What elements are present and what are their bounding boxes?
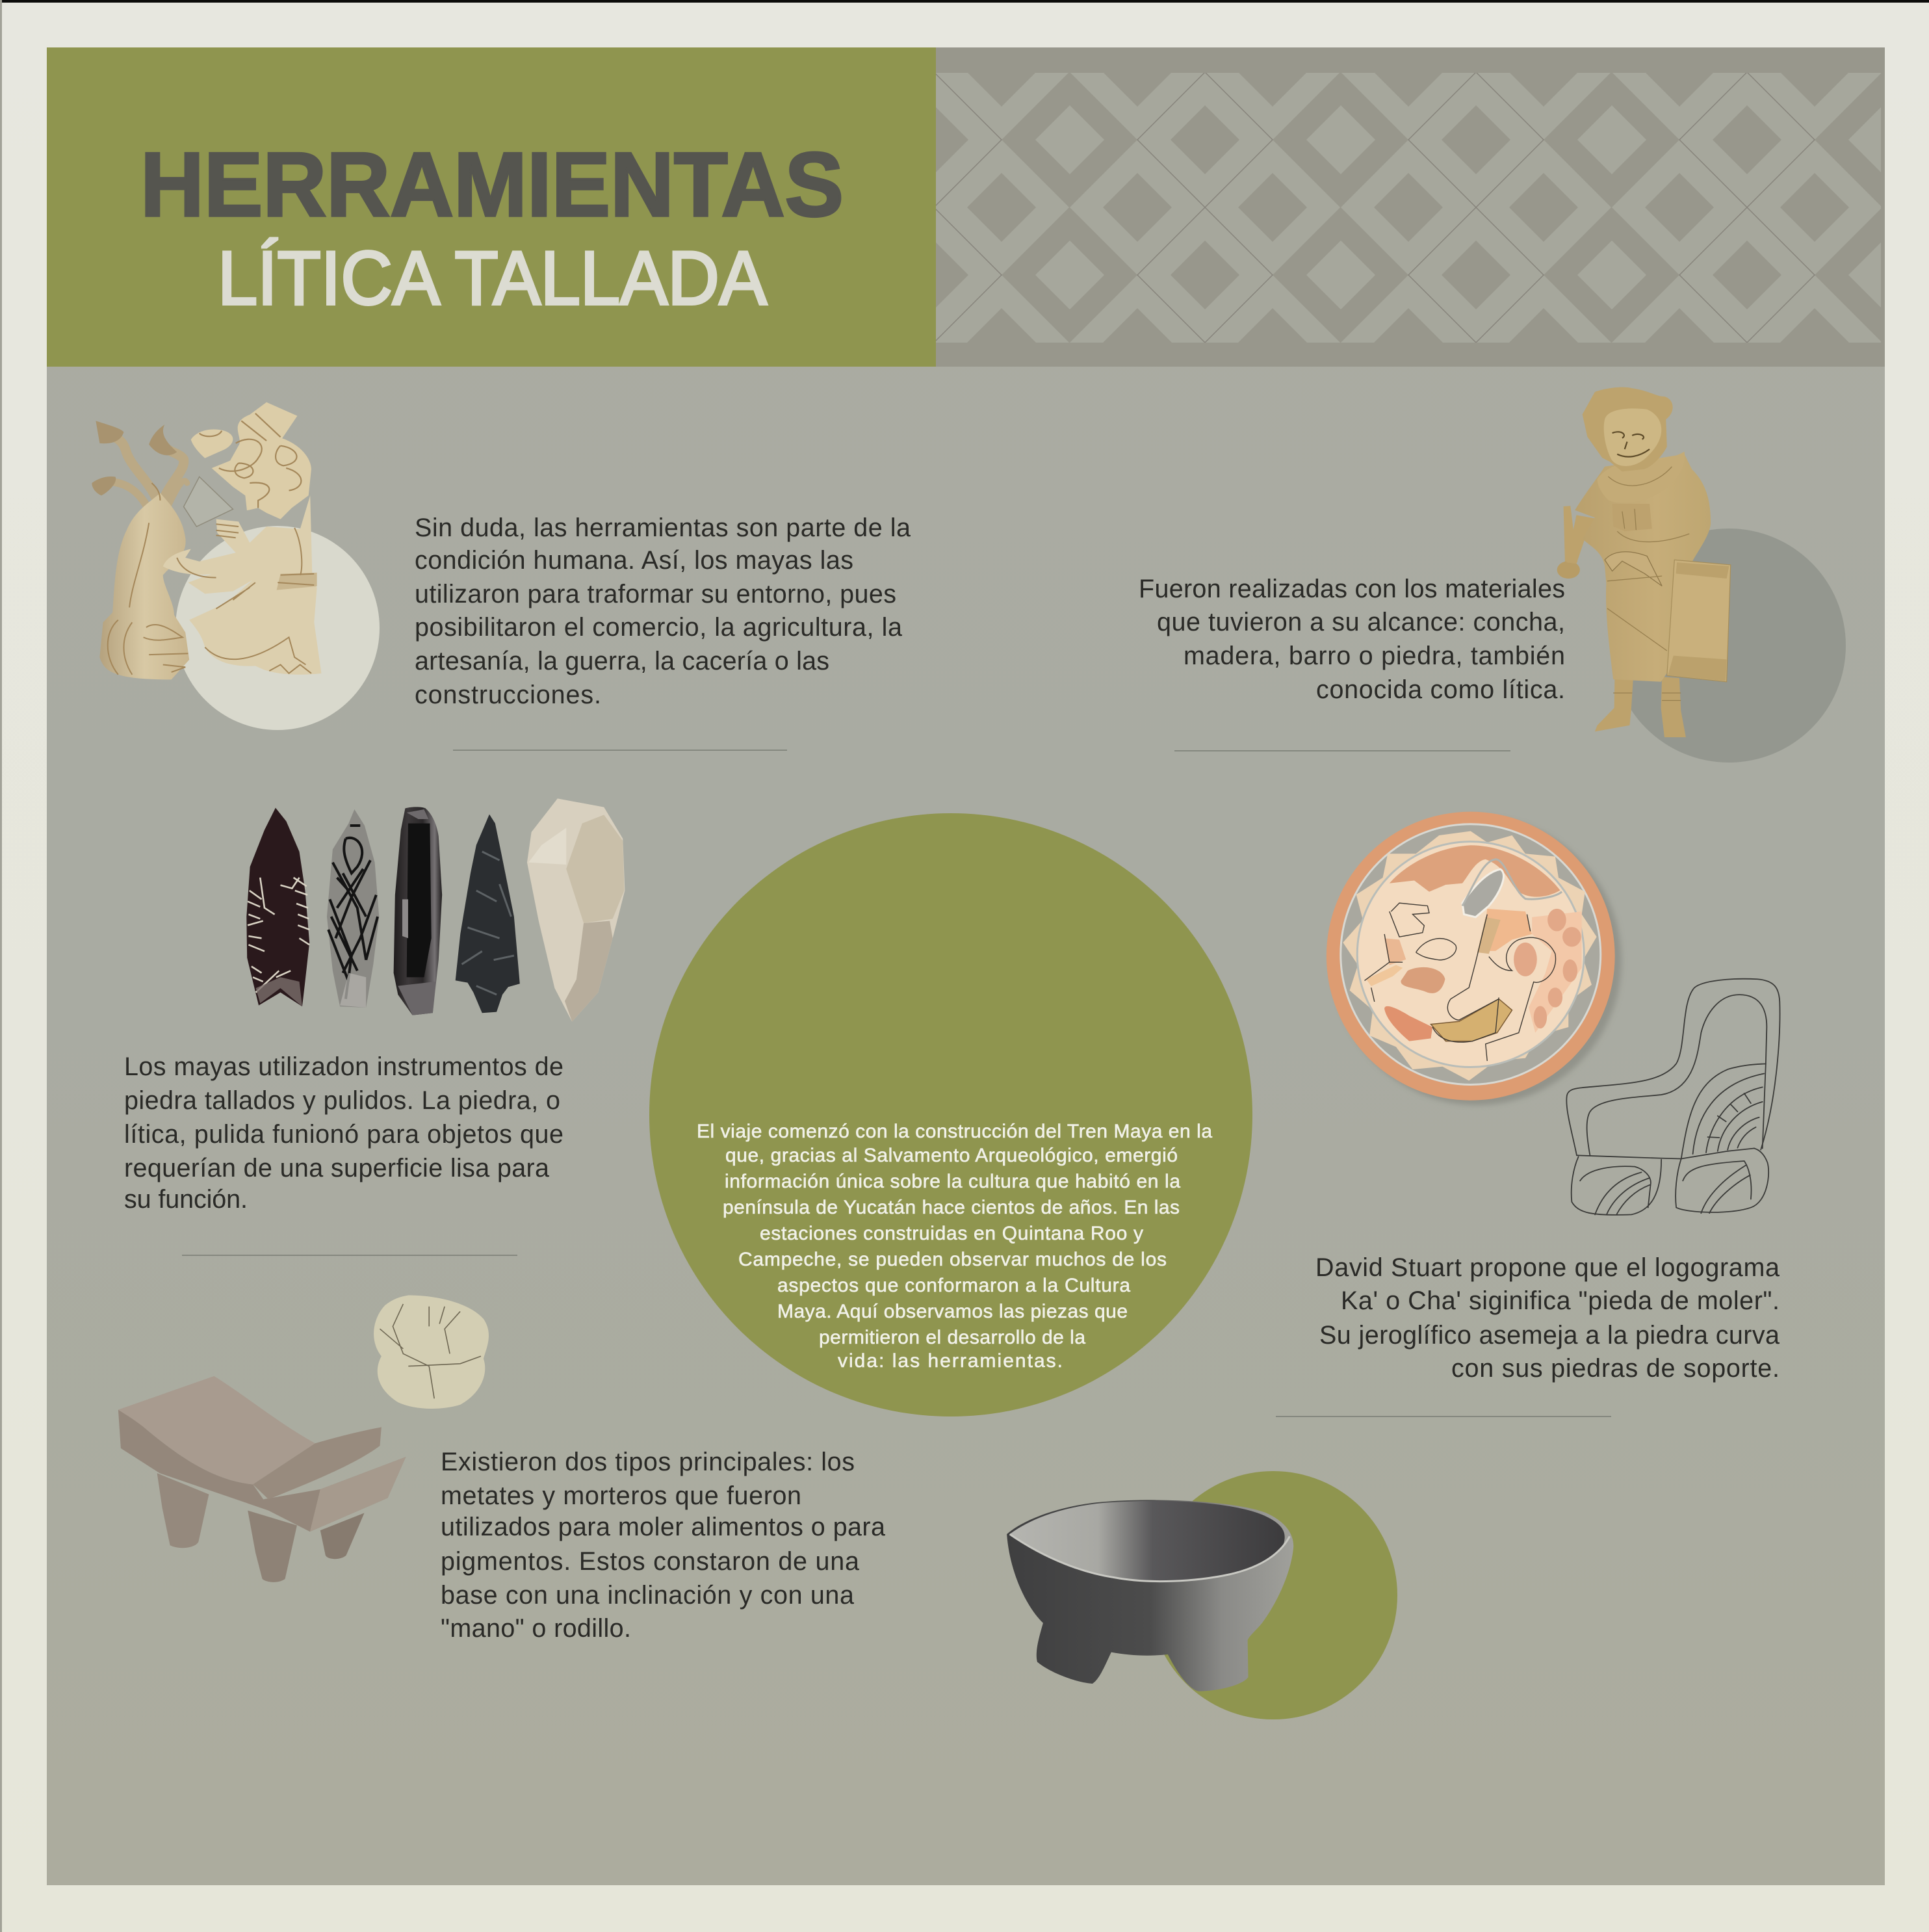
illustration: mortar with green circle [1007,1471,1397,1719]
text: condición humana [415,514,911,709]
plate top orange field [1390,845,1560,897]
text: tipos principales: Existieron dos tipos principales: los [441,1448,855,1476]
mano stone [374,1296,489,1409]
intro text: información única sobre la cultura que habitó en la [725,1171,1180,1192]
text: materiales: madera, barro o piedra, también [1184,642,1565,670]
scribe body [163,495,321,675]
text: condición humana: posibilitaron el comercio, la agricultura, la [415,613,902,642]
text: condición humana: Sin duda, las herramientas son parte de la [415,514,911,542]
text: David Stuart [1315,1253,1780,1383]
mortar body [1007,1500,1293,1691]
intro text: península de Yucatán hace cientos de años. En las [723,1197,1180,1218]
text: condición humana: construcciones. [415,681,601,709]
pale flake [527,798,625,1022]
text: tipos principales [441,1448,885,1643]
stone block being carved [184,477,233,527]
text: piedra tallada: Los mayas utilizadon instrumentos de [124,1052,563,1081]
text: tipos principales: utilizados para moler alimentos o para [441,1513,885,1541]
text: piedra tallada [124,1052,563,1214]
central green circle with intro text [649,813,1252,1416]
metate base [118,1410,406,1532]
legs [1595,678,1633,731]
illustration: stone tools [246,798,625,1022]
intro text: estaciones construidas en Quintana Roo y [760,1223,1143,1244]
text: condición humana: artesanía, la guerra, la cacería o las [415,647,829,675]
metate grinding surface [118,1376,315,1484]
point 1 [246,808,309,1006]
bag [1667,560,1731,682]
intro text [697,1121,1212,1372]
arrowhead [456,815,520,1013]
head and headdress [1583,387,1673,471]
robe [1575,454,1711,682]
illustration: old woman figure with gray circle [1557,387,1846,763]
plate star band [1343,831,1597,1080]
intro text: Maya. Aquí observamos las piezas que [777,1301,1128,1322]
divider lines [182,750,1611,1416]
text: materiales: que tuvieron a su alcance: concha, [1157,608,1565,636]
intro text: aspectos que conformaron a la Cultura [777,1275,1130,1296]
subtitle: LÍTICA TALLADA [218,235,767,320]
text: piedra tallada: lítica, pulida funionó para objetos que [124,1120,563,1149]
intro text: que, gracias al Salvamento Arqueológico, emergió [725,1145,1178,1166]
point 2 [327,809,379,1008]
text: materiales: conocida como lítica. [1316,675,1565,704]
stick and hand [1564,506,1577,562]
illustration: logogram Ka' [1566,979,1780,1215]
text: piedra tallada: requerían de una superficie lisa para [124,1154,549,1182]
illustration: painted plate [1327,812,1622,1105]
mortar interior [1010,1501,1285,1582]
text: materiales [1139,575,1565,704]
text: tipos principales: "mano" o rodillo. [441,1614,631,1643]
text: piedra tallada: su función. [124,1185,248,1214]
tree tendrils [104,436,187,510]
text: materiales: Fueron realizadas con los materiales [1139,575,1565,603]
text: David Stuart: David Stuart propone que el logograma [1315,1253,1780,1282]
intro text: vida: las herramientas. [838,1350,1063,1372]
text: David Stuart: Ka' o Cha' siginifica "pieda de moler". [1341,1286,1780,1315]
illustration: scribe glyph with cream circle [92,402,380,730]
collar and fringe [1612,504,1652,531]
text: condición humana: utilizaron para traformar su entorno, pues [415,580,896,608]
text: tipos principales: pigmentos. Estos constaron de una [441,1547,859,1576]
plate drawn lines [1364,859,1562,1061]
trunk and mask head [99,493,189,679]
title block [47,47,936,367]
headdress [212,402,311,519]
text: tipos principales: base con una inclinación y con una [441,1581,854,1610]
text: piedra tallada: piedra tallados y pulidos. La piedra, o [124,1086,560,1115]
intro text: permitieron el desarrollo de la [819,1327,1085,1348]
obsidian blade [394,807,442,1015]
title: HERRAMIENTAS [140,133,844,235]
intro text: Campeche, se pueden observar muchos de los [738,1249,1167,1270]
text: David Stuart: con sus piedras de soporte. [1451,1354,1780,1383]
metate legs [157,1473,209,1548]
geometric pattern band [936,47,1885,367]
intro text: El viaje comenzó con la construcción del Tren Maya en la [697,1121,1212,1142]
metate roller [253,1427,382,1499]
illustration: metate and mano [118,1296,489,1582]
text: David Stuart: Su jeroglífico asemeja a la piedra curva [1319,1321,1780,1350]
text: condición humana: condición humana. Así, los mayas las [415,546,853,575]
header banner [47,47,1885,367]
text: tipos principales: metates y morteros que fueron [441,1482,801,1510]
